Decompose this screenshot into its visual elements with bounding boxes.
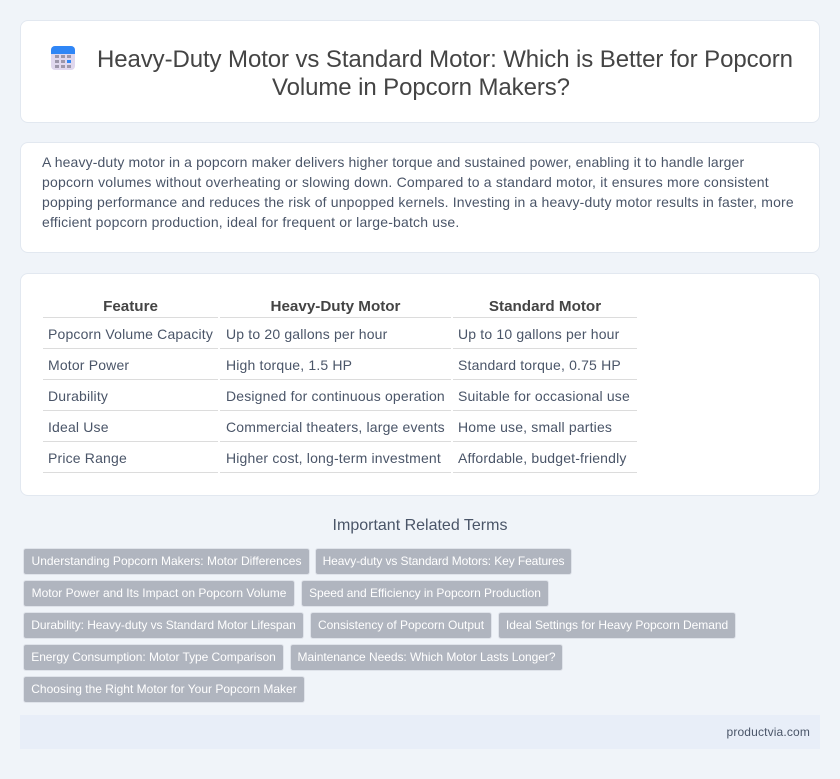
header: Feature: Feature <box>103 298 158 315</box>
row: Price Range: Price Range <box>48 450 127 466</box>
tag <box>302 581 548 606</box>
row: Price Range: Higher cost, long-term investment <box>226 450 441 466</box>
row: Durability: Durability <box>48 388 108 404</box>
row: Durability <box>48 388 630 404</box>
row: Popcorn Volume Capacity: Up to 10 gallons per hour <box>458 326 619 342</box>
intro paragraph <box>42 154 794 230</box>
comparison table <box>43 298 637 473</box>
row: Ideal Use: Commercial theaters, large events <box>226 419 445 435</box>
intro paragraph: popcorn volumes without overheating or slowing down. Compared to a standard motor, it ensures more consistent <box>42 174 769 190</box>
intro paragraph: efficient popcorn production, ideal for frequent or large-batch use. <box>42 214 459 230</box>
tag <box>24 549 309 574</box>
tag <box>499 613 735 638</box>
row: Popcorn Volume Capacity <box>48 326 620 342</box>
intro paragraph: A heavy-duty motor in a popcorn maker delivers higher torque and sustained power, enabling it to handle larger <box>42 154 744 170</box>
intro paragraph: popping performance and reduces the risk of unpopped kernels. Investing in a heavy-duty motor results in faster, more <box>42 194 794 210</box>
row: Ideal Use <box>48 419 612 435</box>
tag <box>24 613 303 638</box>
row: Motor Power: Standard torque, 0.75 HP <box>458 357 621 373</box>
title: Volume in Popcorn Makers? <box>272 74 570 101</box>
footer bar <box>20 715 820 749</box>
row: Popcorn Volume Capacity: Up to 20 gallons per hour <box>226 326 387 342</box>
title <box>97 46 793 101</box>
tag: Understanding Popcorn Makers: Motor Differences <box>32 554 301 568</box>
tag: Durability: Heavy-duty vs Standard Motor Lifespan <box>31 618 296 632</box>
row: Durability: Designed for continuous operation <box>226 388 445 404</box>
tag: Motor Power and Its Impact on Popcorn Volume <box>32 586 286 600</box>
tag: Speed and Efficiency in Popcorn Production <box>309 586 541 600</box>
row: Ideal Use: Home use, small parties <box>458 419 612 435</box>
row: Price Range: Affordable, budget-friendly <box>458 450 627 466</box>
icon: calendar app <box>51 46 75 70</box>
tag: Ideal Settings for Heavy Popcorn Demand <box>506 618 728 632</box>
tag: Consistency of Popcorn Output <box>318 618 484 632</box>
tag <box>24 581 294 606</box>
tag: Energy Consumption: Motor Type Comparison <box>31 650 276 664</box>
footer source: productvia.com <box>727 725 810 739</box>
header: Standard Motor: Standard Motor <box>489 298 601 315</box>
title: Heavy-Duty Motor vs Standard Motor: Which is Better for Popcorn <box>97 46 793 73</box>
tag <box>24 677 304 702</box>
tag: Choosing the Right Motor for Your Popcorn Maker <box>31 682 297 696</box>
row: Price Range <box>48 450 627 466</box>
intro text panel <box>20 142 820 253</box>
tag <box>311 613 491 638</box>
tag <box>24 645 283 670</box>
header: Heavy-Duty Motor: Heavy-Duty Motor <box>271 298 400 315</box>
row: Motor Power: Motor Power <box>48 357 129 373</box>
related terms heading: Important Related Terms <box>333 517 507 534</box>
row: Popcorn Volume Capacity: Popcorn Volume Capacity <box>48 326 213 342</box>
row: Ideal Use: Ideal Use <box>48 419 109 435</box>
row: Motor Power <box>48 357 621 373</box>
tag <box>316 549 571 574</box>
title card <box>20 20 820 123</box>
row: Durability: Suitable for occasional use <box>458 388 630 404</box>
row: Motor Power: High torque, 1.5 HP <box>226 357 352 373</box>
tag: Heavy-duty vs Standard Motors: Key Features <box>323 554 564 568</box>
tag: Maintenance Needs: Which Motor Lasts Longer? <box>298 650 555 664</box>
related terms tags <box>23 548 736 703</box>
comparison table panel <box>20 273 820 496</box>
tag <box>291 645 562 670</box>
